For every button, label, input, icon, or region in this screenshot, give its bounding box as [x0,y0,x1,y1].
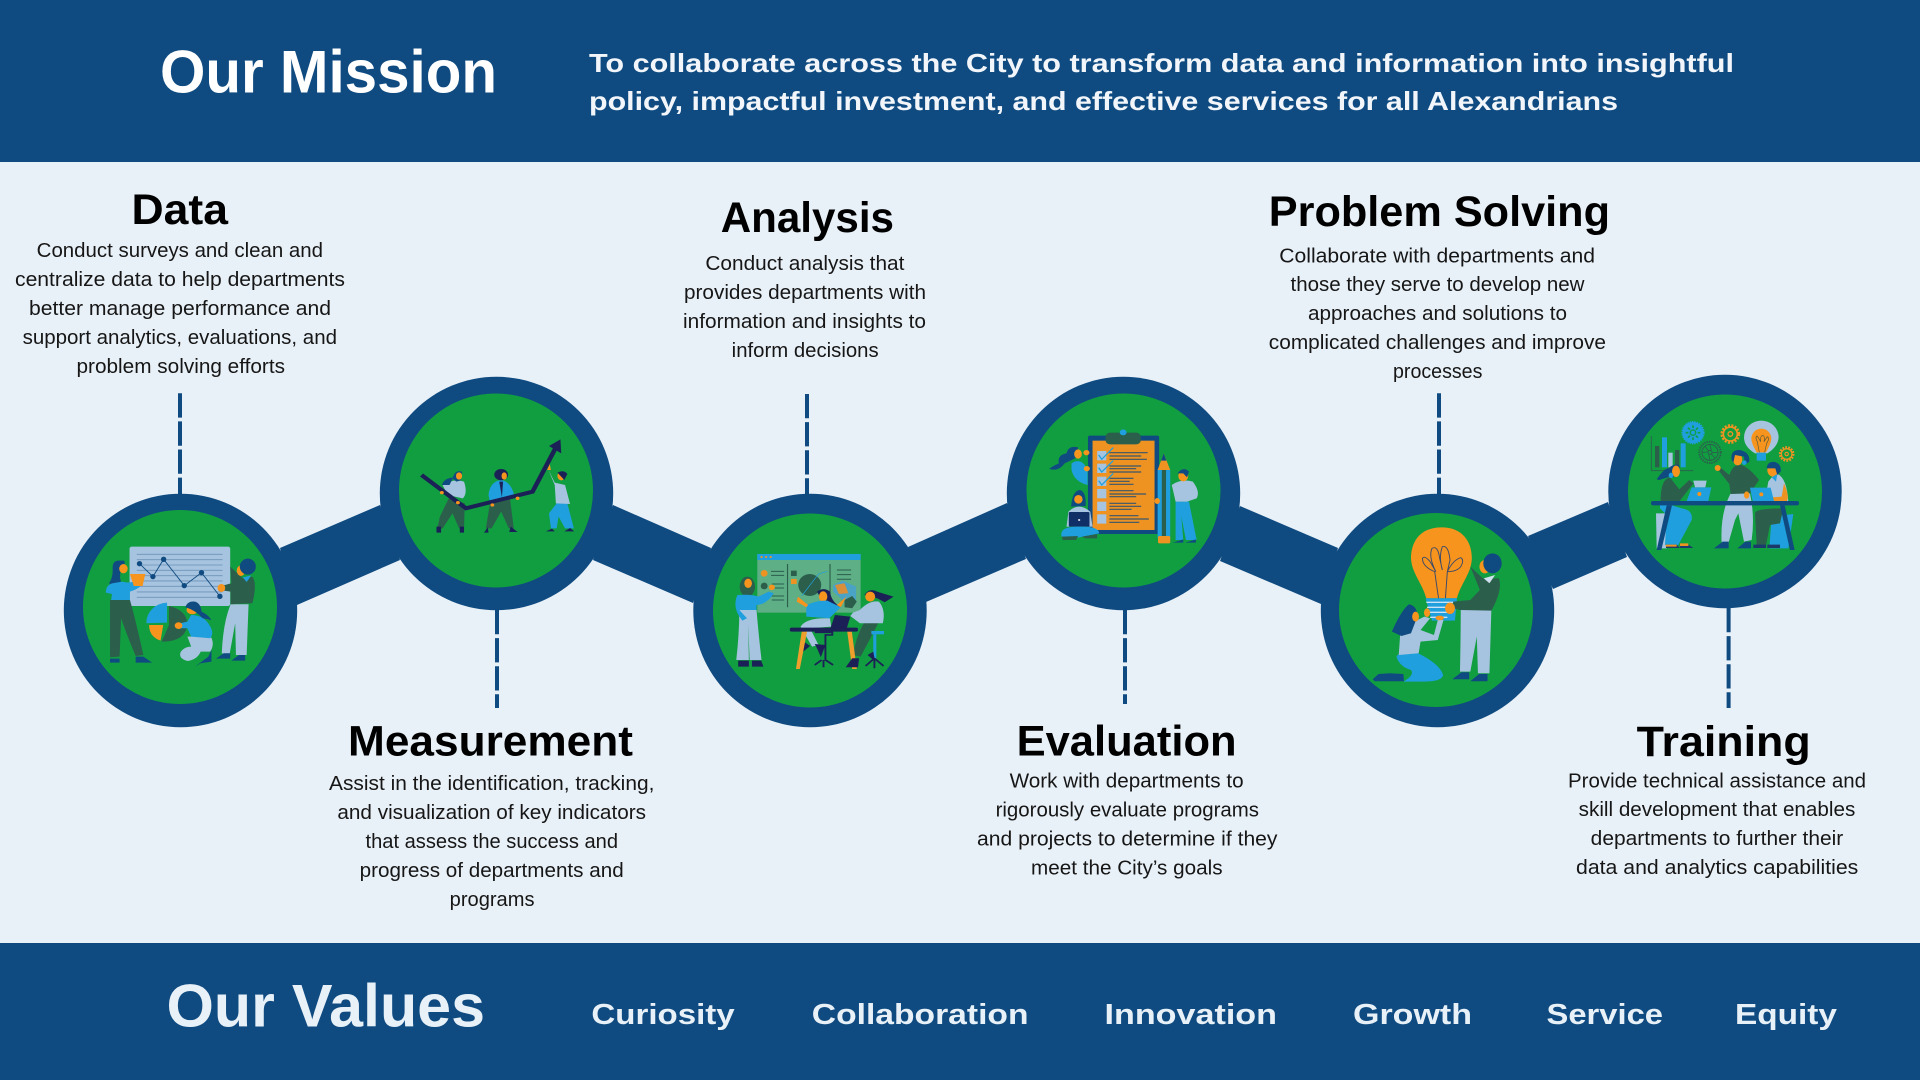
description: Data: Conduct surveys and clean and [37,240,323,262]
value list: Growth [1353,999,1472,1031]
description: Measurement [329,773,654,911]
icon: people with checklist clipboard and pencil [1049,429,1198,543]
heading: Measurement: Measurement [348,718,633,766]
text block: Analysis [683,194,926,362]
icon: team reviewing line chart and pie chart [106,547,256,667]
heading: Problem Solving: Problem Solving [1269,188,1610,236]
heading: Our Mission: Our Mission [160,38,497,106]
text block: Measurement [329,718,654,911]
heading: Data: Data [132,186,229,234]
description: Measurement: and visualization of key indicators [337,802,646,824]
value list: Equity [1735,999,1837,1031]
step circle: Evaluation [1007,377,1240,610]
description: Problem Solving: approaches and solutions to [1308,303,1567,325]
step circle: Analysis [693,494,927,727]
description: Training: data and analytics capabilities [1576,857,1858,879]
description: Evaluation: and projects to determine if they [977,829,1278,851]
heading: Training: Training [1637,718,1811,766]
dashed leader lines [180,393,1729,708]
description: Training: departments to further their [1591,828,1844,850]
description: Measurement: Assist in the identification, tracking, [329,773,654,795]
description: Analysis: provides departments with [684,282,926,304]
description: Problem Solving: complicated challenges and improve [1269,332,1606,354]
description: Measurement: progress of departments and [360,860,624,882]
description: Data: better manage performance and [29,298,331,320]
description: Analysis [683,253,926,362]
text block: Evaluation [977,718,1278,880]
description: Analysis: inform decisions [732,340,879,362]
description: Analysis: Conduct analysis that [705,253,905,275]
text block: Data [15,186,345,378]
description: Data [15,240,345,378]
mission statement: To collaborate across the City to transform data and information into insightful [589,48,1734,78]
description: Measurement: programs [450,889,534,911]
value list: Service [1546,999,1663,1031]
icon: people lifting upward arrow [422,439,574,533]
description: Evaluation [977,771,1278,880]
mission statement [589,48,1734,116]
description: Measurement: that assess the success and [366,831,618,853]
connector path between circles [280,502,1627,605]
description: Problem Solving: processes [1393,361,1482,383]
description: Problem Solving: those they serve to develop new [1290,274,1585,296]
value list: Innovation [1104,999,1277,1031]
description: Problem Solving [1269,245,1606,383]
description: Evaluation: rigorously evaluate programs [996,800,1259,822]
heading: Our Values: Our Values [166,973,485,1040]
icon: team at table with gears and bulb [1651,421,1799,550]
heading: Evaluation: Evaluation [1017,718,1237,766]
value list: Collaboration [812,999,1028,1031]
description: Evaluation: Work with departments to [1010,771,1244,793]
description: Data: problem solving efforts [76,356,285,378]
step circle: Measurement [380,377,613,610]
description: Evaluation: meet the City’s goals [1031,858,1223,880]
heading: Analysis: Analysis [721,194,894,242]
description: Training: Provide technical assistance and [1568,770,1866,792]
description: Training [1568,770,1866,879]
icon: two people holding a giant light bulb [1373,527,1502,682]
mission statement: policy, impactful investment, and effective services for all Alexandrians [589,86,1618,116]
value list [591,999,1837,1031]
value list: Curiosity [591,999,735,1031]
description: Data: support analytics, evaluations, and [23,327,337,349]
panel: mission header [0,0,1920,162]
text block: Problem Solving [1269,188,1610,383]
description: Analysis: information and insights to [683,311,926,333]
step circle: Problem Solving [1321,494,1554,727]
text block: Training [1568,718,1866,879]
icon: team meeting at desk with dashboard [735,554,894,669]
description: Data: centralize data to help departments [15,269,345,291]
panel: values footer [0,943,1920,1080]
step circle: Training [1608,375,1842,608]
step circle: Data [64,494,297,727]
description: Problem Solving: Collaborate with departments and [1279,245,1595,267]
description: Training: skill development that enables [1579,799,1855,821]
